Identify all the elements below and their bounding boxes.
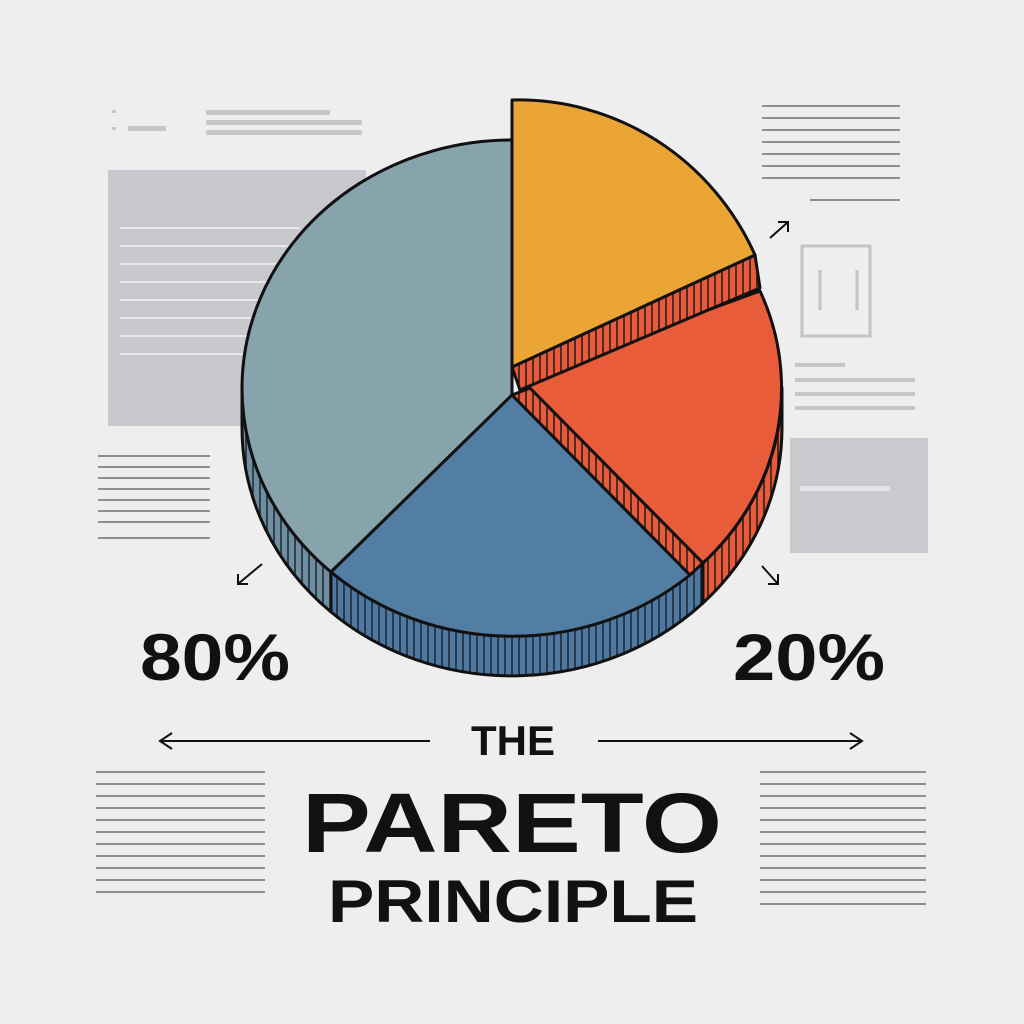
title: THE bbox=[471, 717, 555, 764]
bottom-left text lines bbox=[96, 772, 265, 892]
bottom-right text lines bbox=[760, 772, 926, 904]
slice: blue bbox=[331, 395, 690, 636]
background panel: grey text block left bbox=[108, 170, 366, 426]
title bbox=[302, 717, 722, 935]
background decor: right outlined box bbox=[802, 246, 870, 336]
pie side: red bbox=[703, 388, 782, 603]
pie chart bbox=[242, 100, 782, 676]
arrow: left bbox=[160, 733, 430, 749]
hatched edge yellow bbox=[512, 255, 760, 390]
background panel: grey box right bbox=[790, 438, 928, 553]
pie side: blue bbox=[331, 563, 703, 676]
arrows small bbox=[238, 222, 788, 584]
hatched edge red bbox=[512, 388, 703, 575]
arrow: right bbox=[598, 733, 862, 749]
label: 80%: 80% bbox=[140, 620, 290, 694]
title: PARETO bbox=[302, 776, 722, 870]
slice: grey 80% part bbox=[242, 140, 512, 572]
label: 20%: 20% bbox=[733, 620, 885, 694]
background decor: left mid lines bbox=[98, 456, 210, 538]
title: PRINCIPLE bbox=[328, 868, 698, 935]
background decor: top-left text lines bbox=[112, 110, 362, 135]
slice: yellow bbox=[512, 100, 755, 367]
slice: red bbox=[522, 291, 782, 563]
background decor: right top lines bbox=[762, 106, 900, 200]
pie side: grey bbox=[242, 388, 331, 612]
